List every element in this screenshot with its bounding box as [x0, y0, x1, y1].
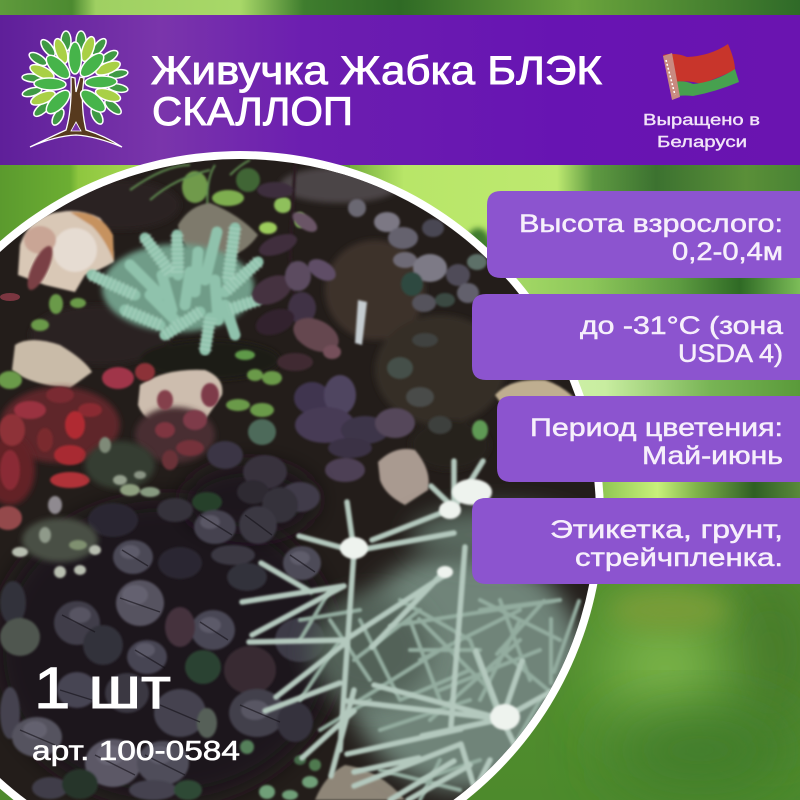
tan rock [378, 449, 429, 505]
made in belarus caption: Выращено в [643, 112, 760, 129]
red barberry [0, 243, 219, 530]
card: height: Высота взрослого: [519, 210, 783, 238]
pale rock center [138, 370, 222, 428]
quantity label: 1 шт [34, 656, 171, 721]
green inner leaves [34, 42, 117, 118]
card: bloom period: Май-июнь [642, 442, 783, 470]
top foliage [130, 160, 306, 234]
card: package contents: Этикетка, грунт, [550, 516, 783, 544]
made in belarus caption [643, 112, 760, 151]
title: СКАЛЛОП [152, 90, 353, 134]
silver plant [242, 461, 590, 800]
dark outer leaves [21, 31, 129, 127]
card: hardiness: USDA 4) [678, 340, 783, 368]
card: package contents: стрейчпленка. [575, 544, 783, 572]
logo: tree [21, 31, 129, 147]
made in belarus caption: Беларуси [657, 134, 747, 151]
small ground cover [240, 740, 321, 800]
white circle frame [0, 151, 604, 800]
title: Живучка Жабка БЛЭК [151, 49, 603, 93]
card: hardiness [472, 294, 800, 380]
rocks [12, 203, 590, 800]
plant photo [0, 150, 620, 800]
rock left [12, 340, 92, 388]
card: height: 0,2-0,4м [672, 238, 783, 266]
grey rock [178, 203, 258, 260]
lime leaves [28, 35, 122, 108]
bottom rock [315, 765, 405, 800]
card: package contents [472, 498, 800, 584]
dark purple plant [247, 165, 415, 482]
ajuga main mass [0, 441, 335, 800]
card: hardiness: до -31°С (зона [580, 312, 783, 340]
tree trunk and ground [30, 77, 122, 147]
sedum [92, 228, 258, 350]
top banner [0, 15, 800, 165]
article number: арт. 100-0584 [32, 735, 240, 766]
belarus flag icon [663, 44, 739, 100]
ajuga top right [348, 199, 487, 434]
card: bloom period [497, 396, 800, 482]
small green shoots [0, 294, 488, 440]
title [151, 49, 603, 134]
card: height [487, 191, 800, 278]
rock upper left [18, 211, 114, 292]
card: bloom period: Период цветения: [530, 414, 783, 442]
soil [34, 166, 504, 426]
small variegated shrub [12, 419, 276, 578]
rock right [495, 380, 590, 430]
